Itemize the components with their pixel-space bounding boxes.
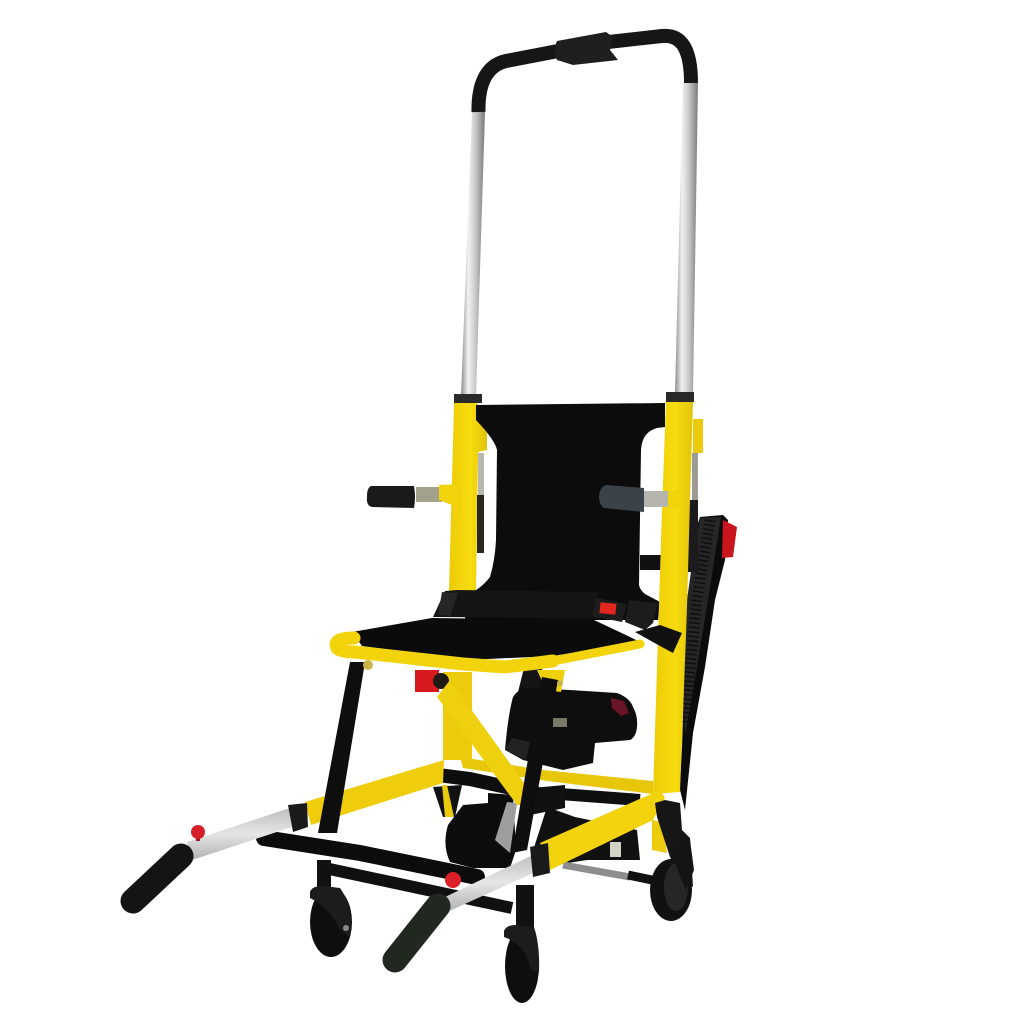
right upright bbox=[653, 402, 693, 794]
front right leg bbox=[512, 677, 558, 853]
right front caster bbox=[504, 885, 539, 1003]
lap belt bbox=[433, 590, 682, 653]
seat frame tube bbox=[336, 638, 640, 667]
diagonal brace bbox=[437, 680, 527, 805]
top handle grip bbox=[478, 32, 691, 112]
leg brackets bbox=[363, 660, 563, 686]
track belt bbox=[680, 515, 737, 810]
right side rail bbox=[540, 790, 665, 870]
upright caps bbox=[454, 392, 694, 403]
front left leg bbox=[318, 662, 365, 833]
right aluminium extension bbox=[443, 843, 550, 912]
left grip bbox=[133, 856, 181, 901]
seat cushion bbox=[352, 618, 640, 660]
rear black mechanism bbox=[433, 775, 652, 880]
right rear slider bbox=[688, 419, 703, 572]
brace bracket and red button bbox=[415, 670, 449, 692]
aluminium handle tube left bbox=[461, 112, 485, 396]
backrest bbox=[465, 403, 665, 620]
left pin button bbox=[191, 825, 205, 841]
rear bracket plate bbox=[652, 800, 693, 887]
left armrest bbox=[367, 484, 462, 508]
right grip bbox=[395, 906, 438, 960]
motor battery unit bbox=[505, 668, 637, 770]
left upright bbox=[449, 403, 487, 592]
lower cross tube bbox=[320, 867, 512, 908]
rear yellow crossbar bbox=[460, 757, 653, 794]
aluminium handle tube right bbox=[675, 82, 698, 394]
left front caster bbox=[310, 860, 352, 957]
left side rail bbox=[305, 760, 444, 825]
bracket under seat bbox=[537, 670, 565, 692]
foot bar bbox=[264, 838, 477, 877]
rear wheel bbox=[650, 840, 694, 921]
rear black tube bbox=[640, 555, 664, 570]
left aluminium extension bbox=[187, 803, 308, 860]
right pin button bbox=[445, 872, 461, 888]
vertical support bbox=[443, 672, 472, 760]
right armrest bbox=[599, 485, 680, 512]
